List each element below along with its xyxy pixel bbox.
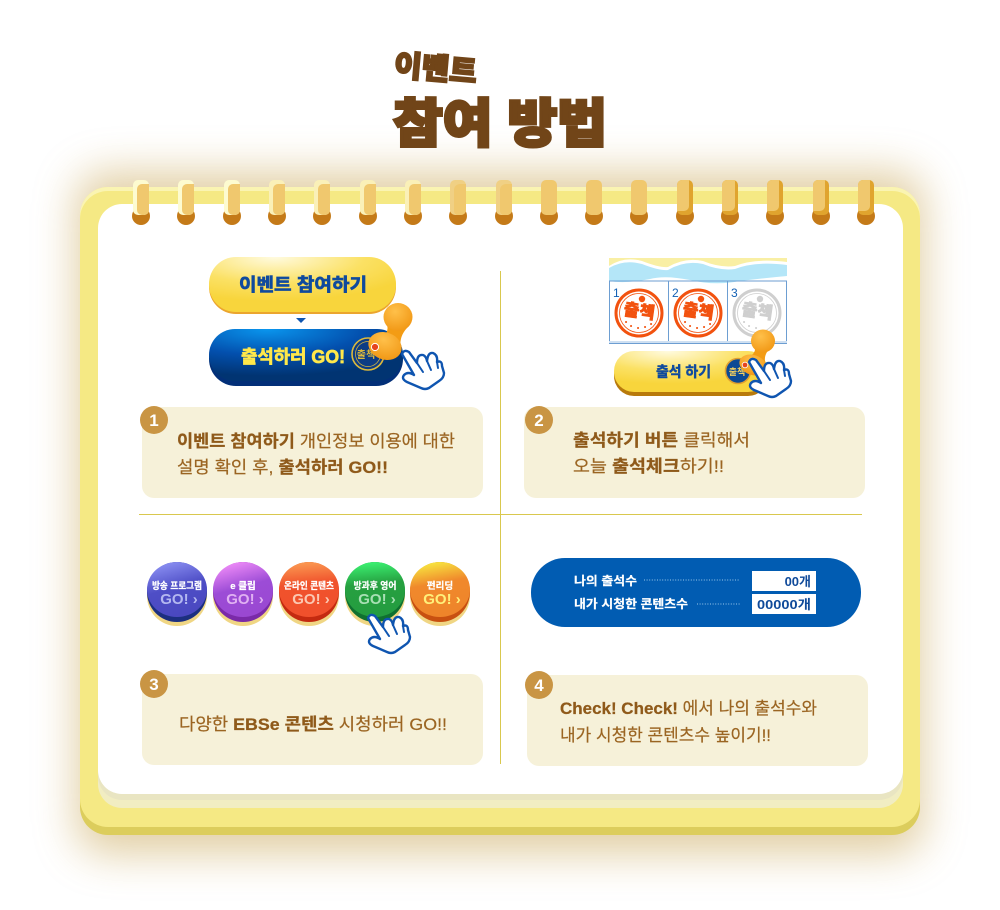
content button: e-clip [213, 562, 273, 626]
icon: hand cursor [749, 359, 791, 397]
text box 4: Check! Check! 에서 나의 출석수와 [560, 699, 817, 718]
panel 1: event participation [140, 257, 483, 498]
content button: online content [279, 562, 339, 626]
content button: broadcast [147, 562, 207, 626]
badge 4 [525, 671, 553, 699]
counter pill: 나의 출석수 [574, 574, 637, 588]
content button: e-clip: GO! › [226, 591, 264, 608]
counter pill: 내가 시청한 콘텐츠수 [574, 596, 688, 611]
content button: after-school English: 방과후 영어 [354, 580, 396, 592]
content button: broadcast: GO! › [160, 591, 198, 608]
badge 3: 3 [149, 675, 159, 694]
attendance calendar: 2 [672, 286, 679, 300]
button: attendance go: 출석하러 GO! [241, 347, 345, 367]
title: small heading: 이벤트 [393, 49, 478, 90]
content button: after-school English [345, 562, 405, 626]
stamp day 2 [675, 290, 721, 336]
panel 2: attendance check [524, 258, 865, 498]
content button: online content: GO! › [292, 591, 330, 608]
counter pill: 00000개 [757, 597, 811, 612]
text box 3 [142, 674, 483, 765]
stamp day 2: 출첵 [681, 300, 715, 323]
button: event participate [209, 257, 396, 314]
badge 1 [140, 406, 168, 434]
title [393, 49, 607, 154]
content button: e-clip: e 클립 [230, 580, 256, 592]
icon: seal [726, 358, 750, 384]
badge 3 [140, 670, 168, 698]
button: attendance: 출석 하기 [656, 364, 711, 381]
badge 2 [525, 406, 553, 434]
content button: online content: 온라인 콘텐츠 [284, 581, 334, 592]
counter pill [531, 558, 861, 627]
text box 1: 설명 확인 후, 출석하러 GO!! [177, 458, 388, 477]
attendance calendar: 3 [731, 286, 738, 300]
content button: fun reading: 펀리딩 [427, 580, 453, 592]
text box 4 [527, 675, 868, 766]
stamp day 3 [734, 290, 780, 336]
title: main heading: 참여 방법 [393, 96, 607, 154]
icon: orange stamp [364, 303, 412, 365]
button: attendance [614, 351, 768, 396]
icon: hand cursor [368, 615, 410, 653]
text box 2: 출석하기 버튼 클릭해서 [573, 431, 750, 450]
icon: hand cursor [402, 351, 444, 389]
text box 4: 내가 시청한 콘텐츠수 높이기!! [560, 726, 771, 745]
badge 2: 2 [534, 411, 544, 430]
text box 1: 이벤트 참여하기 개인정보 이용에 대한 [177, 432, 455, 451]
spiral rings [132, 180, 875, 225]
badge 4: 4 [534, 676, 544, 695]
icon: seal: 출첵 [729, 366, 745, 377]
content button: fun reading: GO! › [423, 591, 461, 608]
content button: after-school English: GO! › [358, 591, 396, 608]
arrow: down [296, 318, 306, 323]
attendance calendar: 1 [613, 286, 620, 300]
stamp day 1: 출첵 [622, 300, 656, 323]
badge 1: 1 [149, 411, 159, 430]
counter pill: 00개 [785, 574, 811, 589]
panel 3: EBSe contents [140, 562, 483, 765]
icon: orange stamp [736, 330, 775, 379]
stamp day 3: 출첵 [740, 300, 774, 323]
icon: seal: 출첵 [357, 348, 375, 361]
content button: broadcast: 방송 프로그램 [152, 580, 202, 592]
panel 4: my counts [525, 558, 868, 766]
button: attendance go [209, 329, 403, 386]
content button: fun reading [410, 562, 470, 626]
notebook board [80, 187, 920, 835]
text box 1 [142, 407, 483, 498]
attendance calendar [609, 258, 787, 344]
text box 2: 오늘 출석체크 하기!! [573, 457, 724, 476]
button: event participate: 이벤트 참여하기 [239, 275, 367, 295]
icon: seal [352, 338, 384, 370]
text box 2 [524, 407, 865, 498]
page background glow [76, 172, 924, 854]
stamp day 1 [616, 290, 662, 336]
text box 3: 다양한 EBSe 콘텐츠 시청하러 GO!! [179, 715, 447, 734]
